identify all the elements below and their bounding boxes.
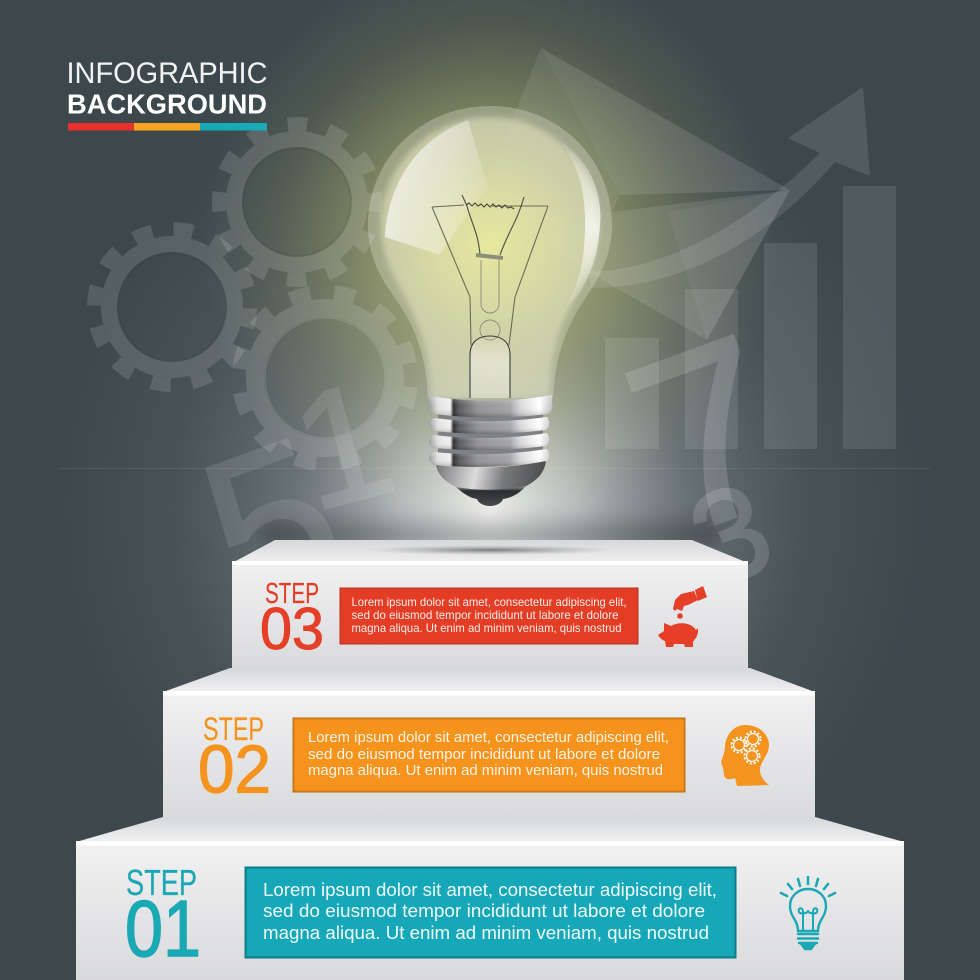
text box: Lorem ipsum dolor sit amet, consectetur adipiscing elit, — [308, 730, 669, 746]
top surface — [232, 540, 748, 563]
step label: STEP — [203, 711, 264, 747]
gear: top — [210, 115, 384, 289]
title — [66, 57, 268, 120]
icon: head with gears — [721, 725, 769, 786]
text box: sed do eiusmod tempor incididunt ut labore et dolore — [308, 747, 660, 763]
bulb glass rim — [368, 106, 612, 398]
background numerals: 5 — [173, 388, 372, 661]
glass highlights — [385, 120, 488, 255]
text box: magna aliqua. Ut enim ad minim veniam, quis nostrud — [308, 763, 663, 779]
text box — [244, 866, 736, 958]
background growth arrow — [590, 87, 870, 288]
light bulb — [368, 106, 612, 506]
bulb shadow — [365, 545, 615, 555]
text box — [292, 718, 686, 792]
step label: 03 — [260, 596, 324, 662]
icon: outline bulb — [781, 877, 835, 949]
step 3 — [232, 540, 748, 668]
step label: 02 — [198, 732, 271, 808]
text box: sed do eiusmod tempor incididunt ut labore et dolore — [352, 609, 618, 622]
front face — [76, 842, 904, 980]
top surface — [76, 817, 904, 842]
background bar chart — [605, 186, 896, 449]
text box: sed do eiusmod tempor incididunt ut labore et dolore — [263, 900, 705, 921]
step label: 01 — [125, 884, 201, 973]
title line 1: INFOGRAPHIC — [66, 57, 268, 90]
front face — [232, 563, 748, 668]
bulb glass body — [381, 117, 599, 398]
filament — [432, 195, 548, 398]
step label: STEP — [126, 862, 197, 903]
gear: left — [93, 228, 251, 386]
front face — [163, 692, 815, 818]
background numerals: 3 — [672, 453, 790, 615]
step label: STEP — [265, 578, 319, 610]
screw base — [428, 395, 552, 506]
icon: coin in piggy bank — [658, 586, 707, 647]
step 2 — [163, 668, 815, 818]
horizon line — [60, 468, 930, 469]
background numerals — [173, 280, 822, 661]
background paper plane — [480, 48, 790, 340]
gears — [93, 115, 420, 473]
text box: magna aliqua. Ut enim ad minim veniam, quis nostrud — [352, 622, 622, 635]
text box: Lorem ipsum dolor sit amet, consectetur adipiscing elit, — [352, 596, 626, 609]
text box: Lorem ipsum dolor sit amet, consectetur adipiscing elit, — [263, 879, 717, 900]
top surface — [163, 668, 815, 692]
background numerals: 1 — [274, 344, 411, 546]
text box: magna aliqua. Ut enim ad minim veniam, quis nostrud — [263, 922, 709, 943]
title colour bar — [68, 123, 267, 130]
text box — [340, 588, 638, 644]
title line 2: BACKGROUND — [67, 88, 267, 120]
step 1 — [76, 817, 904, 980]
background numerals: 7 — [596, 280, 822, 590]
gear: lower — [230, 283, 420, 473]
